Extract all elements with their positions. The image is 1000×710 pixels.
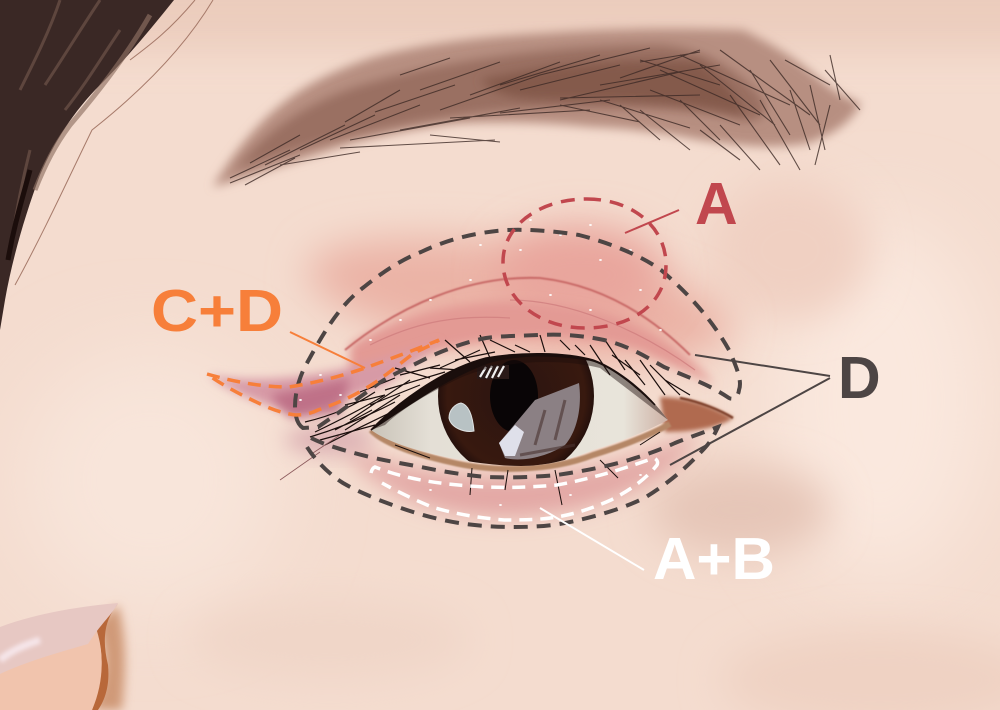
eyebrow hairs <box>230 48 860 185</box>
eye <box>368 353 672 473</box>
eyebrow <box>213 29 861 187</box>
hair <box>0 0 213 330</box>
finger <box>0 603 125 710</box>
crease lines <box>345 278 690 355</box>
label D: D <box>838 345 881 411</box>
tear duct <box>660 397 733 432</box>
label C+D: C+D <box>151 278 283 344</box>
label A: A <box>695 171 738 237</box>
leader lines <box>290 210 830 570</box>
eye shadow <box>208 216 741 518</box>
zone D outlines <box>295 230 740 527</box>
glitter <box>300 220 661 505</box>
zone A circle <box>503 199 666 328</box>
zone A+B outline <box>371 458 658 520</box>
label A+B: A+B <box>653 526 775 592</box>
eyelashes <box>280 335 690 505</box>
zone C+D outline <box>207 340 439 415</box>
